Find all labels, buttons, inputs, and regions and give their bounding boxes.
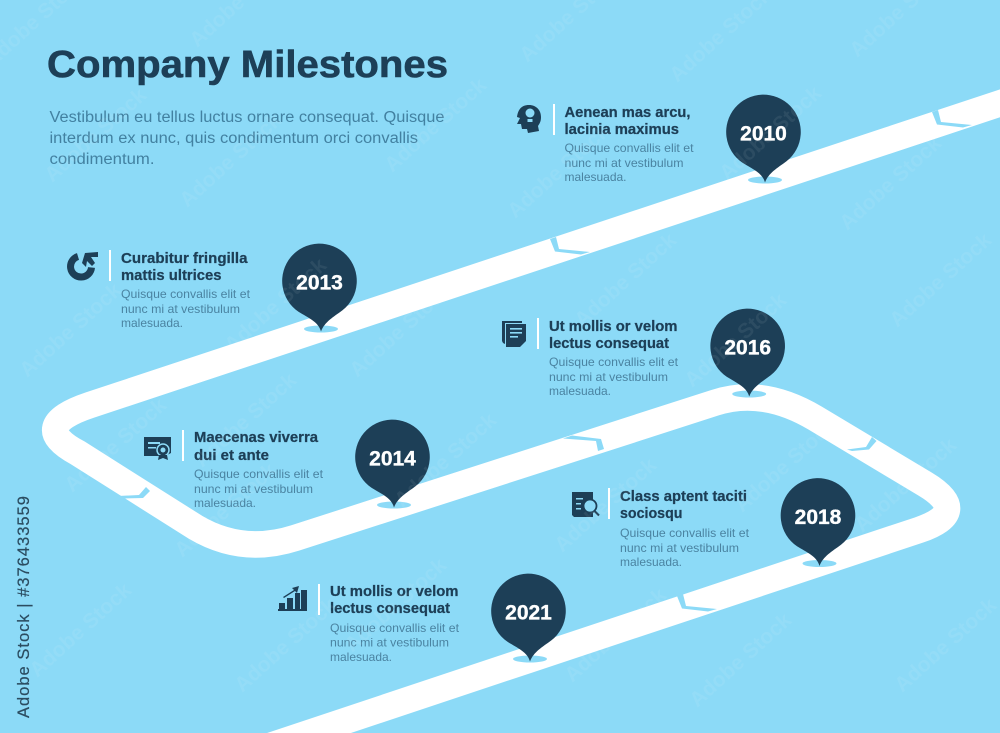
milestone text [549,319,679,398]
watermarks: Adobe Stock [685,608,796,712]
milestone text [330,584,460,664]
icon: donut chart [71,252,98,277]
milestone text: Class aptent taciti [620,489,747,505]
pin 2021 [491,574,566,662]
watermarks: Adobe Stock [503,119,614,223]
milestone text: Curabitur fringilla [121,251,248,267]
milestone text: nunc mi at vestibulum [564,156,684,170]
watermarks: Adobe Stock [175,108,286,212]
watermarks: Adobe Stock [680,288,791,392]
milestone text: nunc mi at vestibulum [620,541,739,555]
milestone text: Quisque convallis elit et [330,621,460,635]
pin 2014: 2014 [369,448,416,470]
watermarks: Adobe Stock [550,453,661,557]
milestone 2013 [71,244,357,332]
milestone text: Quisque convallis elit et [620,526,750,540]
watermarks: Adobe Stock [890,593,1000,697]
watermarks: Adobe Stock [850,433,961,537]
watermarks: Adobe Stock [560,583,671,687]
watermarks: Adobe Stock [835,131,946,235]
divider [182,430,184,461]
watermarks: Adobe Stock [345,278,456,382]
milestone text: malesuada. [564,170,626,184]
divider [109,250,111,281]
milestone text: malesuada. [330,650,392,664]
milestone text: malesuada. [121,316,183,330]
milestone text: Quisque convallis elit et [549,355,679,369]
milestone text: Ut mollis or velom [330,584,458,600]
pin 2010 [726,95,801,184]
milestone text: sociosqu [620,506,682,522]
intro text: Vestibulum eu tellus luctus ornare consequat. Quisque [50,109,445,126]
pin 2013 [282,244,357,332]
watermarks: Adobe Stock [60,393,171,497]
watermarks: Adobe Stock [885,228,996,332]
icon: certificate [144,437,171,460]
watermarks: Adobe Stock [570,228,681,332]
icon: documents [502,321,526,347]
milestone text: nunc mi at vestibulum [194,482,313,496]
milestone text: Quisque convallis elit et [121,287,251,301]
title: Company Milestones [47,44,448,86]
milestone 2018 [572,478,855,569]
milestone text: mattis ultrices [121,268,222,284]
divider [608,488,610,519]
divider [537,318,539,349]
watermarks: Adobe Stock [380,73,491,177]
milestone text: malesuada. [194,496,256,510]
divider [553,104,555,135]
milestone text: malesuada. [620,555,682,569]
watermarks: Adobe Stock [730,413,841,517]
watermarks: Adobe Stock [190,368,301,472]
intro text [50,109,445,168]
pin 2010: 2010 [740,122,787,146]
watermarks: Adobe Stock [170,458,281,562]
pin 2018: 2018 [795,506,842,529]
watermarks: Adobe Stock [230,593,341,697]
milestone text [121,251,251,330]
watermarks: Adobe Stock [715,81,826,185]
milestone text: dui et ante [194,448,269,464]
pin 2014 [355,420,430,508]
milestone text: Ut mollis or velom [549,319,678,335]
milestone text: nunc mi at vestibulum [121,302,240,316]
milestone text: Maecenas viverra [194,430,319,446]
milestone 2016 [502,309,785,398]
pin 2016 [710,309,785,398]
stock id side label: Adobe Stock | #376433559 [15,496,33,718]
watermarks: Adobe Stock [220,253,331,357]
milestone text: nunc mi at vestibulum [330,636,449,650]
milestone text: malesuada. [549,384,611,398]
intro text: condimentum. [50,151,154,168]
icon: document search [572,492,599,517]
divider [318,584,320,615]
milestone 2010 [517,95,801,184]
milestone text [194,430,324,510]
icon: head with lightbulb [517,105,541,133]
milestone text [620,489,750,569]
milestone text: Quisque convallis elit et [564,141,694,155]
pin 2016: 2016 [724,336,771,360]
icon: growth chart [278,586,307,611]
milestone text: lacinia maximus [564,122,679,138]
milestone text: nunc mi at vestibulum [549,370,668,384]
watermarks: Adobe Stock [390,408,501,512]
intro text: interdum ex nunc, quis condimentum orci convallis [50,130,418,147]
watermarks: Adobe Stock [25,578,136,682]
milestone text: lectus consequat [330,601,450,617]
milestone text [564,105,694,184]
watermarks: Adobe Stock [340,553,451,657]
milestone text: Aenean mas arcu, [564,105,690,121]
pin 2021: 2021 [505,602,552,624]
milestone 2014 [144,420,430,510]
milestone 2021 [278,574,566,664]
pin 2018 [781,478,855,567]
milestone text: Quisque convallis elit et [194,467,324,481]
watermarks: Adobe Stock [15,278,126,382]
watermarks: Adobe Stock [40,83,151,187]
pin 2013: 2013 [296,272,343,294]
milestone text: lectus consequat [549,336,669,352]
